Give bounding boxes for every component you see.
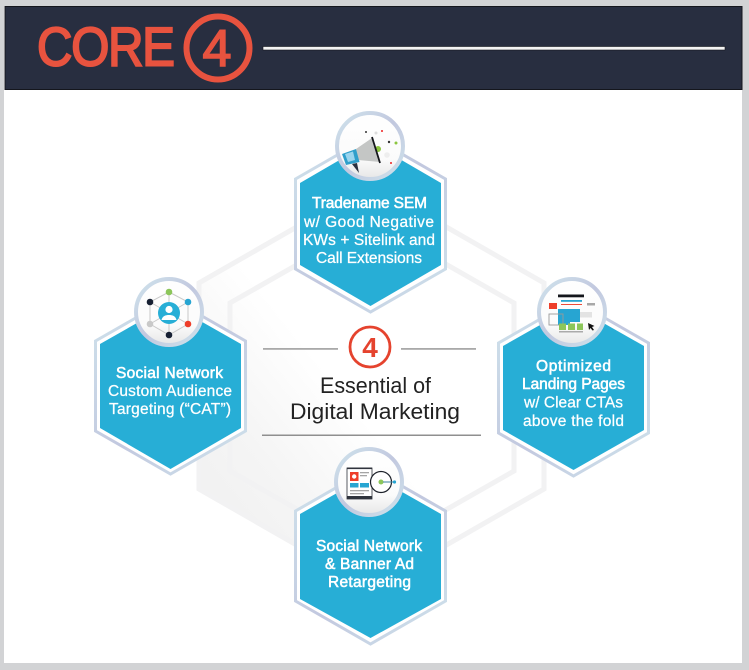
text: Social Network CAT: Custom Audience [108, 383, 232, 400]
title rule right [401, 348, 476, 350]
hexagon [296, 136, 446, 312]
panel: Social Network CAT [96, 279, 246, 474]
icon: megaphone [337, 113, 403, 179]
panel: Tradename SEM [296, 113, 446, 312]
badge: 4 in red circle: 4 [362, 332, 378, 363]
text: Social Network CAT [108, 365, 232, 418]
text: Optimized Landing Pages: w/ Clear CTAs [523, 394, 623, 412]
text: Tradename SEM: KWs + Sitelink and [303, 232, 435, 249]
icon: network [136, 279, 202, 345]
badge: 4 in red circle [350, 327, 390, 367]
text: Social Network CAT: Targeting (“CAT”) [109, 401, 231, 418]
panel: Retargeting [296, 449, 446, 644]
header banner [5, 6, 742, 90]
header rule [263, 46, 725, 50]
text: Retargeting: & Banner Ad [325, 556, 414, 573]
logo badge: 4 in circle [186, 16, 250, 80]
title line 1: Essential of [320, 373, 432, 398]
text: Tradename SEM: Tradename SEM [312, 195, 427, 212]
text: Tradename SEM [303, 195, 435, 267]
icon: landing page [539, 279, 605, 345]
hexagon [296, 468, 446, 644]
title line 2: Digital Marketing [290, 399, 460, 424]
text: Social Network CAT: Social Network [116, 365, 223, 382]
text: Optimized Landing Pages: above the fold [523, 413, 624, 430]
title rule bottom [262, 434, 481, 436]
background hexagon outer [199, 184, 544, 588]
hexagon [498, 300, 648, 476]
center title block [262, 327, 481, 436]
text: Optimized Landing Pages: Optimized [536, 358, 611, 375]
text: Optimized Landing Pages [522, 358, 625, 430]
text: Retargeting: Social Network [316, 538, 422, 555]
title rule left [263, 348, 338, 350]
text: Tradename SEM: w/ Good Negative [303, 214, 434, 231]
text: Optimized Landing Pages: Landing Pages [522, 376, 625, 393]
text: Retargeting: Retargeting [328, 574, 411, 591]
logo word: CORE: CORE [37, 17, 175, 78]
hexagon [96, 298, 246, 474]
background hexagon inner [230, 222, 514, 552]
panel: Optimized Landing Pages [498, 279, 648, 476]
logo badge: 4 in circle: 4 [203, 20, 231, 78]
icon: ad retargeting [336, 449, 402, 515]
text: Retargeting [316, 538, 422, 591]
text: Tradename SEM: Call Extensions [316, 250, 422, 267]
